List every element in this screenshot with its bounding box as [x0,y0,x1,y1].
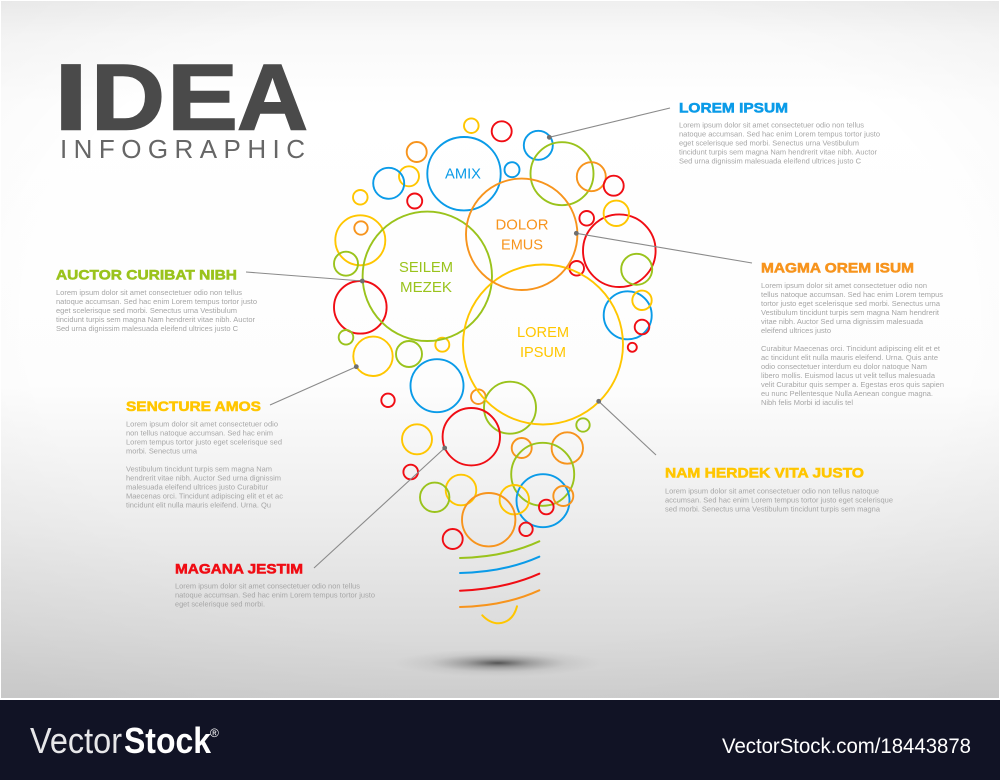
title word IDEA: I [54,44,88,149]
circle: Lorem Ipsum: IPSUM [520,344,566,361]
text block: Nam Herdek Vita Justo [665,465,893,513]
body text: odio consectetuer interdum eu dolor natoque Nam [761,362,927,371]
body text: Vestibulum tincidunt turpis sem magna Nam [126,464,272,473]
body text: eget scelerisque sed morbi. [175,599,265,608]
heading: MAGMA OREM ISUM [761,260,914,276]
text block: Sencture Amos [126,398,283,509]
body text: eleifend ultrices justo [761,326,831,335]
text block: Auctor Curibat Nibh [56,266,257,333]
heading: NAM HERDEK VITA JUSTO [665,465,864,481]
title word IDEA: E [167,44,238,149]
body text: Lorem ipsum dolor sit amet consectetuer odio [126,420,278,429]
circle: Lorem Ipsum [463,264,623,424]
body text: non tellus natoque accumsan. Sed hac enim [126,429,273,438]
body text: libero mollis. Euismod lacus ut velit tellus malesuada [761,371,936,380]
footer logo: ® [210,726,219,740]
body text: morbi. Senectus urna [126,447,198,456]
body text: ac tincidunt elit nulla mauris eleifend. Urna. Quis ante [761,353,938,362]
leader lines [246,108,752,568]
heading: LOREM IPSUM [679,100,788,116]
text block: Magma Orem Isum [761,260,944,407]
circle: Dolor Emus: EMUS [501,236,543,254]
body text: Lorem ipsum dolor sit amet consectetuer odio non tellus natoque [665,486,879,495]
body text [175,581,375,608]
body text: Lorem ipsum dolor sit amet consectetuer odio non tellus [56,288,242,297]
circle: Seilem Mezek: SEILEM [399,259,453,276]
light bulb diagram [334,118,656,623]
body text [761,281,944,407]
body text: vitae nibh. Auctor Sed urna dignissim malesuada [761,317,924,326]
body text: eget scelerisque sed morbi. Senectus urna Vestibulum [56,306,237,315]
circle: Seilem Mezek: MEZEK [400,279,452,296]
text block: Lorem Ipsum [679,100,880,166]
body text: malesuada eleifend ultrices justo Curabitur [126,482,268,491]
body text: Nibh felis Morbi id iaculis tel [761,398,853,407]
footer bar [0,700,1000,780]
title word IDEA: D [91,44,165,149]
heading: MAGANA JESTIM [175,560,303,576]
body text: velit Curabitur quis semper a. Egestas eros quis sapien [761,380,944,389]
body text: Sed urna dignissim malesuada eleifend ultrices justo C [56,324,238,333]
body text [665,486,893,513]
bulb small circles [334,118,656,549]
body text: Curabitur Maecenas orci. Tincidunt adipiscing elit et et [761,344,941,353]
bulb ground shadow [393,649,603,677]
subtitle INFOGRAPHIC: INFOGRAPHIC [60,134,305,164]
title word IDEA: A [237,44,308,149]
body text: Lorem ipsum dolor sit amet consectetuer odio non tellus [679,121,864,130]
body text: Maecenas orci. Tincidunt adipiscing elit et et ac [126,491,283,500]
body text: tincidunt turpis sem magna Nam hendrerit vitae nibh. Auctor [56,315,255,324]
body text: tellus natoque accumsan. Sed hac enim Lorem tempus [761,290,943,299]
body text: tincidunt turpis sem magna Nam hendrerit vitae nibh. Auctor [679,148,877,157]
body text [126,420,283,509]
body text: accumsan. Sed hac enim Lorem tempus tortor justo eget scelerisque [665,495,893,504]
bulb base lines [460,541,539,623]
circle: Dolor Emus: DOLOR [496,216,549,234]
footer logo: Stock [124,720,212,761]
body text: sed morbi. Senectus urna Vestibulum tincidunt turpis sem magna [665,504,881,513]
footer logo: Vector [30,720,122,761]
title word IDEA [54,44,308,149]
circle: Seilem Mezek [363,212,492,341]
circle: Dolor Emus [466,179,577,290]
body text: natoque accumsan. Sed hac enim Lorem tempus tortor justo [175,590,375,599]
body text: tincidunt elit nulla mauris eleifend. Urna. Qu [126,500,271,509]
body text: natoque accumsan. Sed hac enim Lorem tempus tortor justo [56,297,257,306]
body text: Lorem ipsum dolor sit amet consectetuer odio non tellus [175,581,360,590]
body text: hendrerit vitae nibh. Auctor Sed urna dignissim [126,473,281,482]
body text: natoque accumsan. Sed hac enim Lorem tempus tortor justo [679,130,880,139]
body text: Sed urna dignissim malesuada eleifend ultrices justo C [679,157,861,166]
circle: Amix [427,137,501,210]
body text: Lorem tempus tortor justo eget scelerisque sed [126,438,282,447]
body text: Lorem ipsum dolor sit amet consectetuer odio non [761,281,927,290]
title [54,44,308,164]
body text: eget scelerisque sed morbi. Senectus urna Vestibulum [679,139,859,148]
body text: Vestibulum tincidunt turpis sem magna Nam hendrerit [761,308,940,317]
footer logo [30,720,219,761]
footer url: VectorStock.com/18443878 [722,735,971,758]
text block: Magana Jestim [175,560,375,608]
circle: Lorem Ipsum: LOREM [517,324,569,341]
body text [679,121,880,166]
body text: tortor justo eget scelerisque sed morbi. Senectus urna [761,299,941,308]
heading: AUCTOR CURIBAT NIBH [56,266,237,282]
circle: Amix: AMIX [445,166,481,182]
body text [56,288,257,333]
heading: SENCTURE AMOS [126,398,261,414]
body text: eu nunc Pellentesque Nulla Aenean congue magna. [761,389,933,398]
